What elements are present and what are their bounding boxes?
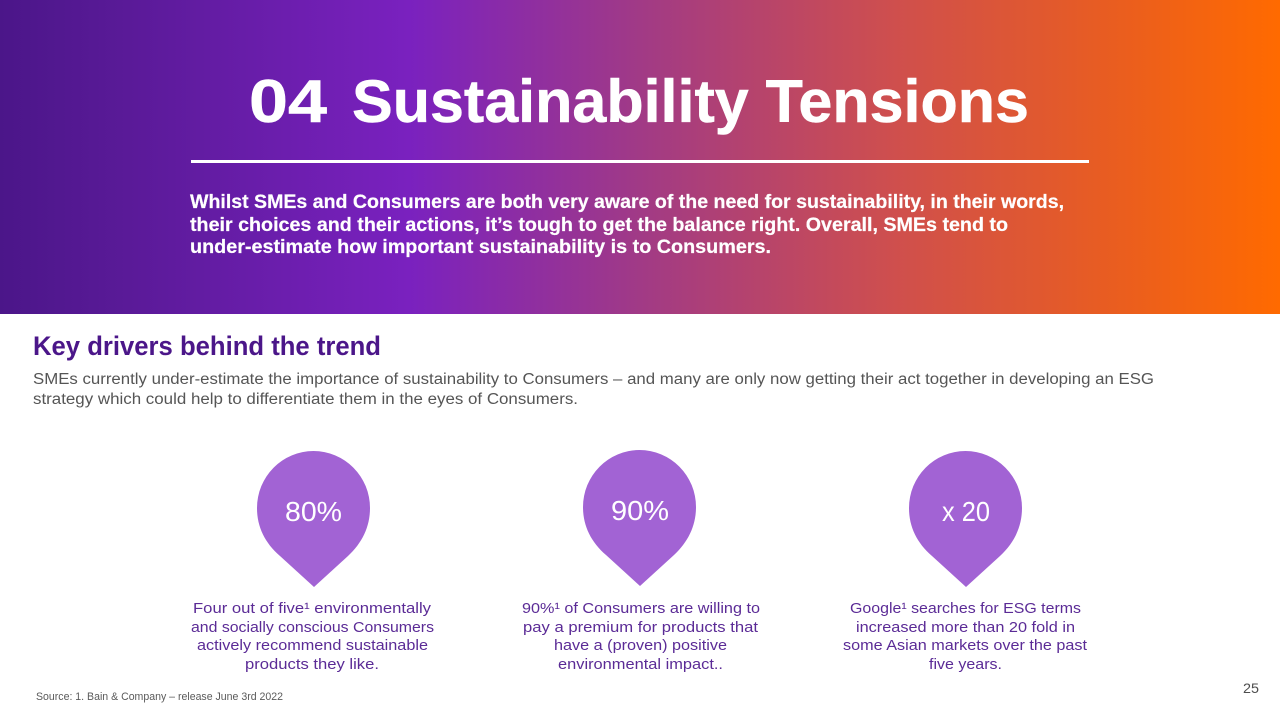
stat card: 90% [522, 450, 760, 673]
stat card: 80% [191, 451, 434, 673]
icon: pin with 90% [583, 450, 696, 586]
section intro text: SMEs currently under-estimate the importance of sustainability to Consumers – and many are only now getting their act together in developing an ESG [33, 371, 1154, 388]
header summary text [190, 192, 1064, 258]
header summary text: Whilst SMEs and Consumers are both very aware of the need for sustainability, in their words, [190, 192, 1064, 213]
caption: 80%: and socially conscious Consumers [191, 619, 434, 636]
icon: pin with 80% [257, 451, 370, 587]
header summary text: their choices and their actions, it’s tough to get the balance right. Overall, SMEs tend to [190, 215, 1008, 236]
caption: 80%: actively recommend sustainable [197, 637, 428, 654]
icon: pin with x 20 [909, 451, 1022, 587]
section intro text: strategy which could help to differentiate them in the eyes of Consumers. [33, 391, 578, 408]
icon: pin with x 20: x 20 [942, 496, 990, 527]
caption: 80% [191, 600, 434, 673]
caption: 90%: environmental impact.. [558, 656, 723, 673]
caption: 90%: pay a premium for products that [523, 619, 759, 636]
caption: 90%: have a (proven) positive [554, 637, 727, 654]
caption: 90%: 90%¹ of Consumers are willing to [522, 600, 760, 617]
title: Sustainability Tensions [352, 68, 1029, 135]
caption: 80%: products they like. [245, 656, 379, 673]
caption: x 20: Google¹ searches for ESG terms [850, 600, 1081, 617]
header summary text: under-estimate how important sustainability is to Consumers. [190, 237, 771, 258]
caption: 90% [522, 600, 760, 673]
caption: x 20 [843, 600, 1088, 673]
icon: pin with 80%: 80% [285, 496, 342, 527]
caption: x 20: five years. [929, 656, 1002, 673]
source note: Source: 1. Bain & Company – release June 3rd 2022 [36, 691, 283, 703]
caption: x 20: increased more than 20 fold in [856, 619, 1075, 636]
page number: 25 [1243, 681, 1259, 696]
section heading: key drivers: Key drivers behind the trend [33, 331, 381, 361]
panel: gradient header banner [0, 0, 1280, 314]
title: 04 [249, 68, 328, 135]
stat card: x 20 [843, 451, 1088, 673]
section intro text [33, 371, 1154, 408]
icon: pin with 90%: 90% [611, 495, 669, 526]
caption: 80%: Four out of five¹ environmentally [193, 600, 432, 617]
caption: x 20: some Asian markets over the past [843, 637, 1088, 654]
